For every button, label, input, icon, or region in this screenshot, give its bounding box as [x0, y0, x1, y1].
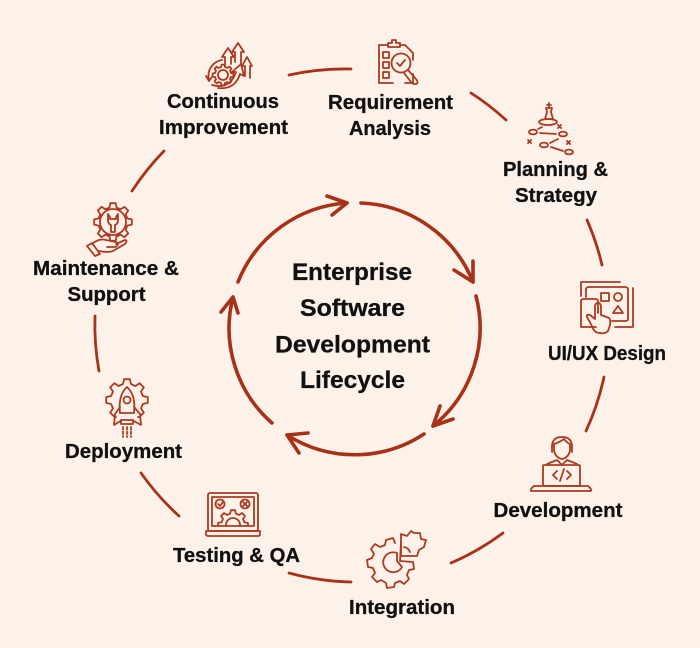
icon: chess piece and play map: [528, 103, 573, 154]
icon: developer at laptop: [531, 437, 591, 491]
icon: touch screen with shapes: [581, 282, 633, 333]
step: continuous improvement: [159, 43, 288, 139]
icon: hand holding gear and wrench: [87, 203, 132, 256]
step: requirement analysis: [328, 40, 453, 140]
icon: gear with rising arrows: [206, 43, 252, 88]
center title: [275, 259, 430, 394]
label: Development: [494, 500, 623, 522]
step: maintenance and support: [33, 203, 179, 306]
label: [159, 91, 288, 139]
label: Testing & QA: [173, 545, 300, 567]
label: Improvement: [159, 117, 288, 139]
step: ui/ux design: [548, 282, 666, 365]
step: planning and strategy: [503, 103, 608, 207]
label: Maintenance &: [33, 258, 179, 280]
label: UI/UX Design: [548, 343, 666, 365]
inner cycle arrows: [221, 196, 480, 455]
step: deployment: [65, 379, 182, 463]
icon: rocket in gear: [106, 379, 148, 437]
label: Strategy: [515, 185, 598, 207]
label: Planning &: [503, 159, 608, 181]
label: [33, 258, 179, 306]
step: testing and qa: [173, 493, 300, 567]
center title: Software: [300, 295, 405, 322]
label: [503, 159, 608, 207]
label: Support: [68, 284, 146, 306]
center title: Development: [275, 332, 430, 358]
step: development: [494, 437, 623, 522]
outer ring connector arcs: [95, 69, 604, 582]
label: Requirement: [328, 92, 453, 114]
center title: Enterprise: [292, 259, 412, 286]
icon: laptop with gear and checks: [206, 493, 260, 536]
label: Integration: [349, 597, 455, 619]
center title: Lifecycle: [300, 367, 405, 394]
icon: gears merging: [367, 531, 426, 588]
step: integration: [349, 531, 455, 619]
label: Deployment: [65, 441, 182, 463]
icon: clipboard with magnifier: [379, 40, 418, 84]
label: Continuous: [167, 91, 279, 113]
label: [328, 92, 453, 140]
label: Analysis: [349, 118, 431, 140]
